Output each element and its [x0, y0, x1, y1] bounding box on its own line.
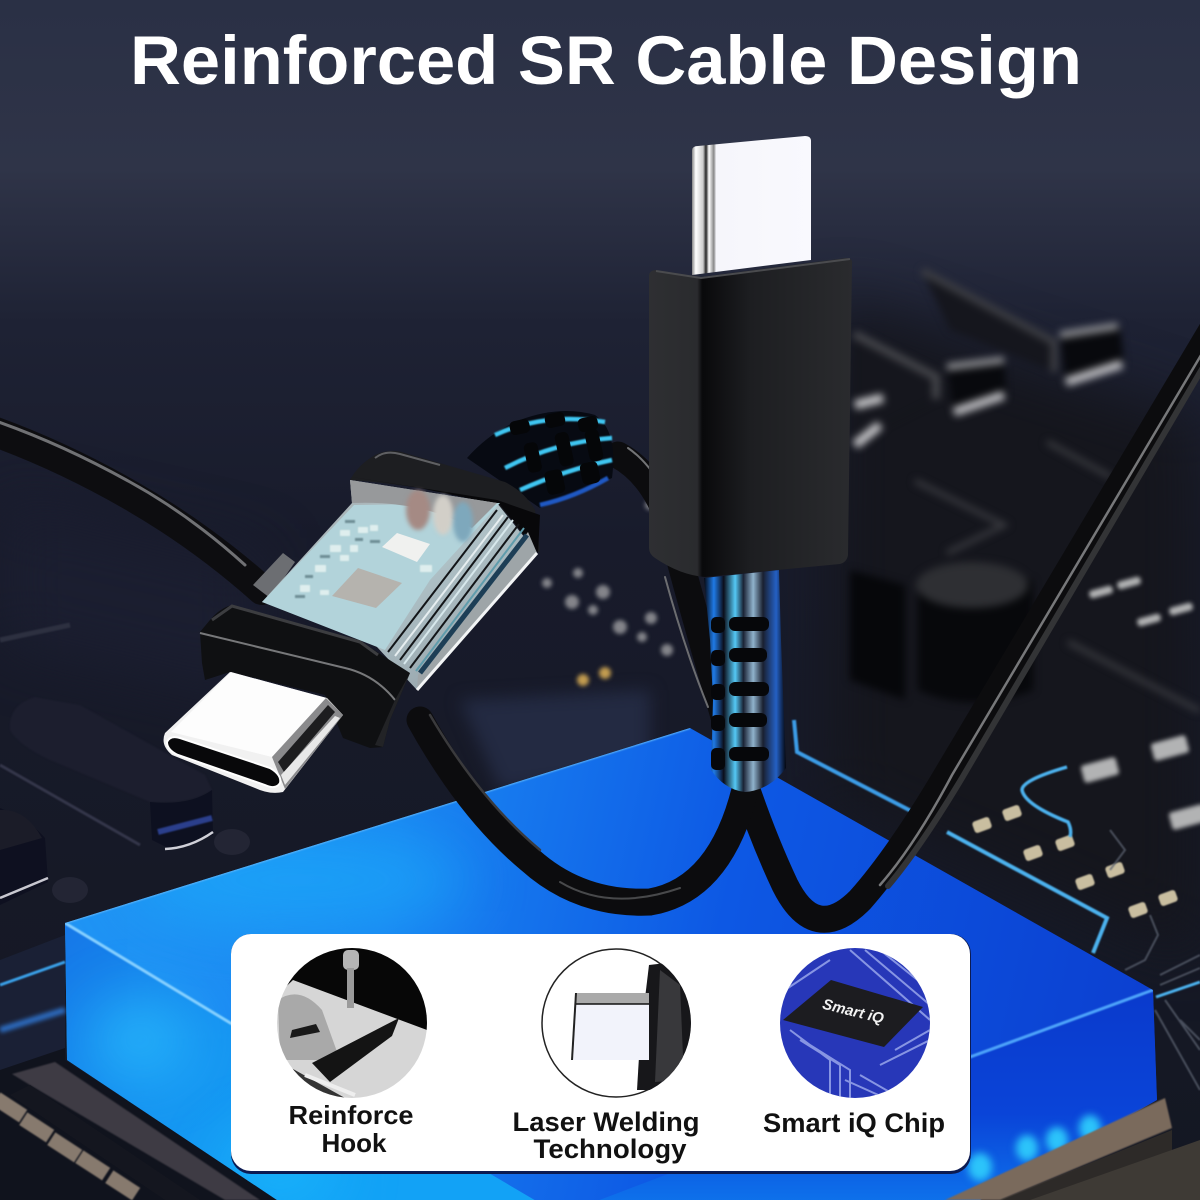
- internal circuit board: [262, 480, 500, 650]
- upper USB-C connector: [649, 136, 852, 792]
- glowing blue circuit traces: [794, 720, 1200, 997]
- decor: lower-left chip with gold pins: [0, 935, 280, 1200]
- icon: reinforce hook: [277, 948, 427, 1098]
- braided strain relief: [467, 411, 613, 508]
- cable: long black lead looping behind connectors: [0, 325, 1200, 919]
- transparent USB-C connector with chip inside: [164, 411, 613, 793]
- ribbed side stripes: [388, 510, 524, 671]
- feature panel: [231, 934, 971, 1174]
- icon: smart iQ chip: Smart iQ: [821, 996, 886, 1028]
- decor: gold edge at block base: [945, 1098, 1200, 1200]
- blue block: left front face: [65, 923, 560, 1200]
- title: Reinforced SR Cable Design: [130, 22, 1082, 99]
- metal plug: [692, 136, 811, 275]
- icon: smart iQ chip: [780, 948, 930, 1098]
- metal plug: [164, 672, 343, 793]
- strain relief: [704, 570, 786, 792]
- label: smart iQ chip: Smart iQ Chip: [763, 1108, 945, 1138]
- decor: blurred component outlines, upper right: [850, 271, 1200, 711]
- decor: gold pads: [971, 804, 1179, 919]
- translucent body: [262, 480, 537, 690]
- label: reinforce hook: Reinforce: [288, 1100, 414, 1130]
- rear collar: [350, 451, 540, 553]
- decor: solder pads: [542, 500, 1200, 830]
- icon: laser welding: [542, 949, 692, 1097]
- label: laser welding technology: Laser Welding: [512, 1107, 700, 1137]
- front collar: [200, 605, 410, 748]
- black housing: [649, 258, 852, 577]
- small neck: [253, 553, 295, 598]
- label: reinforce hook: Hook: [322, 1128, 387, 1158]
- label: laser welding technology: Technology: [534, 1134, 686, 1164]
- blue block: right front face: [560, 990, 1157, 1200]
- blue glowing chip block: [60, 720, 1170, 1200]
- decor: pill shaped components, left: [0, 625, 250, 905]
